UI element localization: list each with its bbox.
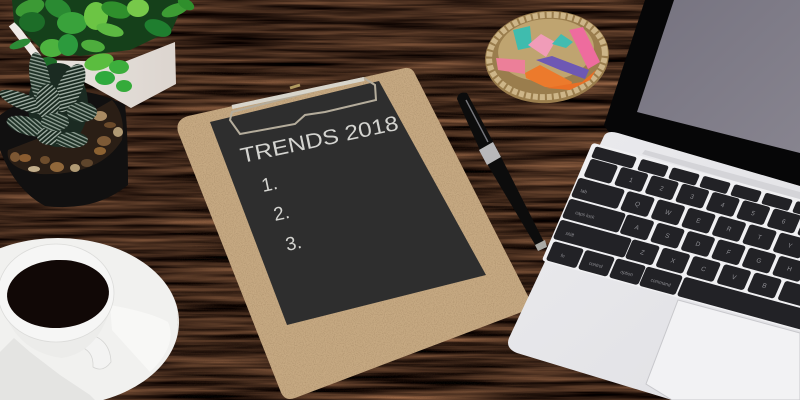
kraft board	[177, 68, 530, 399]
key labels: 3	[689, 193, 695, 201]
bottom key row	[547, 242, 800, 358]
list number 2: 2.	[272, 202, 292, 226]
list number 1: 1.	[260, 173, 280, 197]
orange clip	[525, 65, 572, 89]
qwerty key row	[572, 178, 800, 275]
basket	[481, 6, 613, 108]
key labels: caps lock	[574, 210, 596, 221]
succulent	[0, 51, 97, 148]
laptop	[508, 0, 800, 400]
black pen	[457, 93, 547, 251]
key labels: B	[761, 282, 768, 290]
function key row	[592, 147, 800, 227]
green leaves	[8, 0, 196, 92]
key labels: S	[664, 232, 671, 240]
laptop base	[508, 132, 800, 400]
list number 3: 3.	[284, 232, 304, 256]
title text: TRENDS 2018	[238, 112, 401, 168]
key labels: 6	[780, 218, 787, 226]
key labels: F	[725, 249, 732, 257]
key labels: Y	[786, 242, 794, 250]
number key row	[584, 159, 800, 250]
teal clip	[513, 26, 532, 50]
tall magenta clip	[569, 27, 600, 69]
key labels: option	[619, 269, 634, 278]
key labels: control	[588, 261, 604, 270]
purple clip	[536, 56, 589, 79]
key labels: C	[700, 266, 707, 274]
key labels: H	[786, 266, 793, 273]
clipboard	[177, 68, 530, 399]
metal clip	[230, 78, 376, 134]
white potted plant	[8, 0, 196, 108]
trackpad	[646, 300, 800, 400]
key labels: Q	[634, 201, 641, 209]
cup handle	[78, 333, 111, 369]
key labels: G	[755, 257, 763, 265]
laptop lid	[604, 0, 800, 186]
key labels	[552, 166, 800, 316]
key labels: 5	[750, 210, 756, 218]
key labels: 1	[628, 177, 634, 184]
key labels: 4	[719, 202, 726, 209]
key labels: Z	[639, 249, 646, 257]
black plastic pot	[0, 91, 128, 207]
pink clip	[496, 58, 525, 74]
key labels: V	[730, 274, 738, 282]
key labels: X	[669, 257, 677, 265]
key labels: D	[694, 241, 702, 249]
white square pot	[12, 22, 176, 108]
key labels: command	[650, 278, 672, 289]
black pot with succulent	[0, 51, 128, 207]
cup body	[0, 300, 113, 358]
white saucer	[0, 238, 179, 400]
woven basket with clips	[481, 6, 613, 108]
key labels: 2	[658, 185, 665, 193]
key labels: tab	[579, 188, 588, 195]
key labels: R	[725, 226, 733, 234]
home key row	[563, 199, 800, 290]
key labels: E	[695, 217, 702, 225]
shift key row	[554, 220, 800, 315]
coffee cup on saucer	[0, 238, 179, 400]
cup rim	[0, 244, 114, 342]
key labels: W	[664, 209, 672, 217]
laptop screen	[637, 0, 800, 153]
key labels: shift	[564, 231, 576, 239]
pink binder clip	[528, 34, 555, 57]
second teal clip	[552, 34, 573, 48]
coffee surface	[5, 257, 111, 331]
keyboard	[542, 143, 800, 360]
black paper	[210, 81, 486, 325]
key labels: A	[633, 224, 641, 232]
key labels: fn	[559, 253, 566, 260]
pebbles	[8, 100, 123, 174]
key labels: T	[756, 234, 763, 242]
